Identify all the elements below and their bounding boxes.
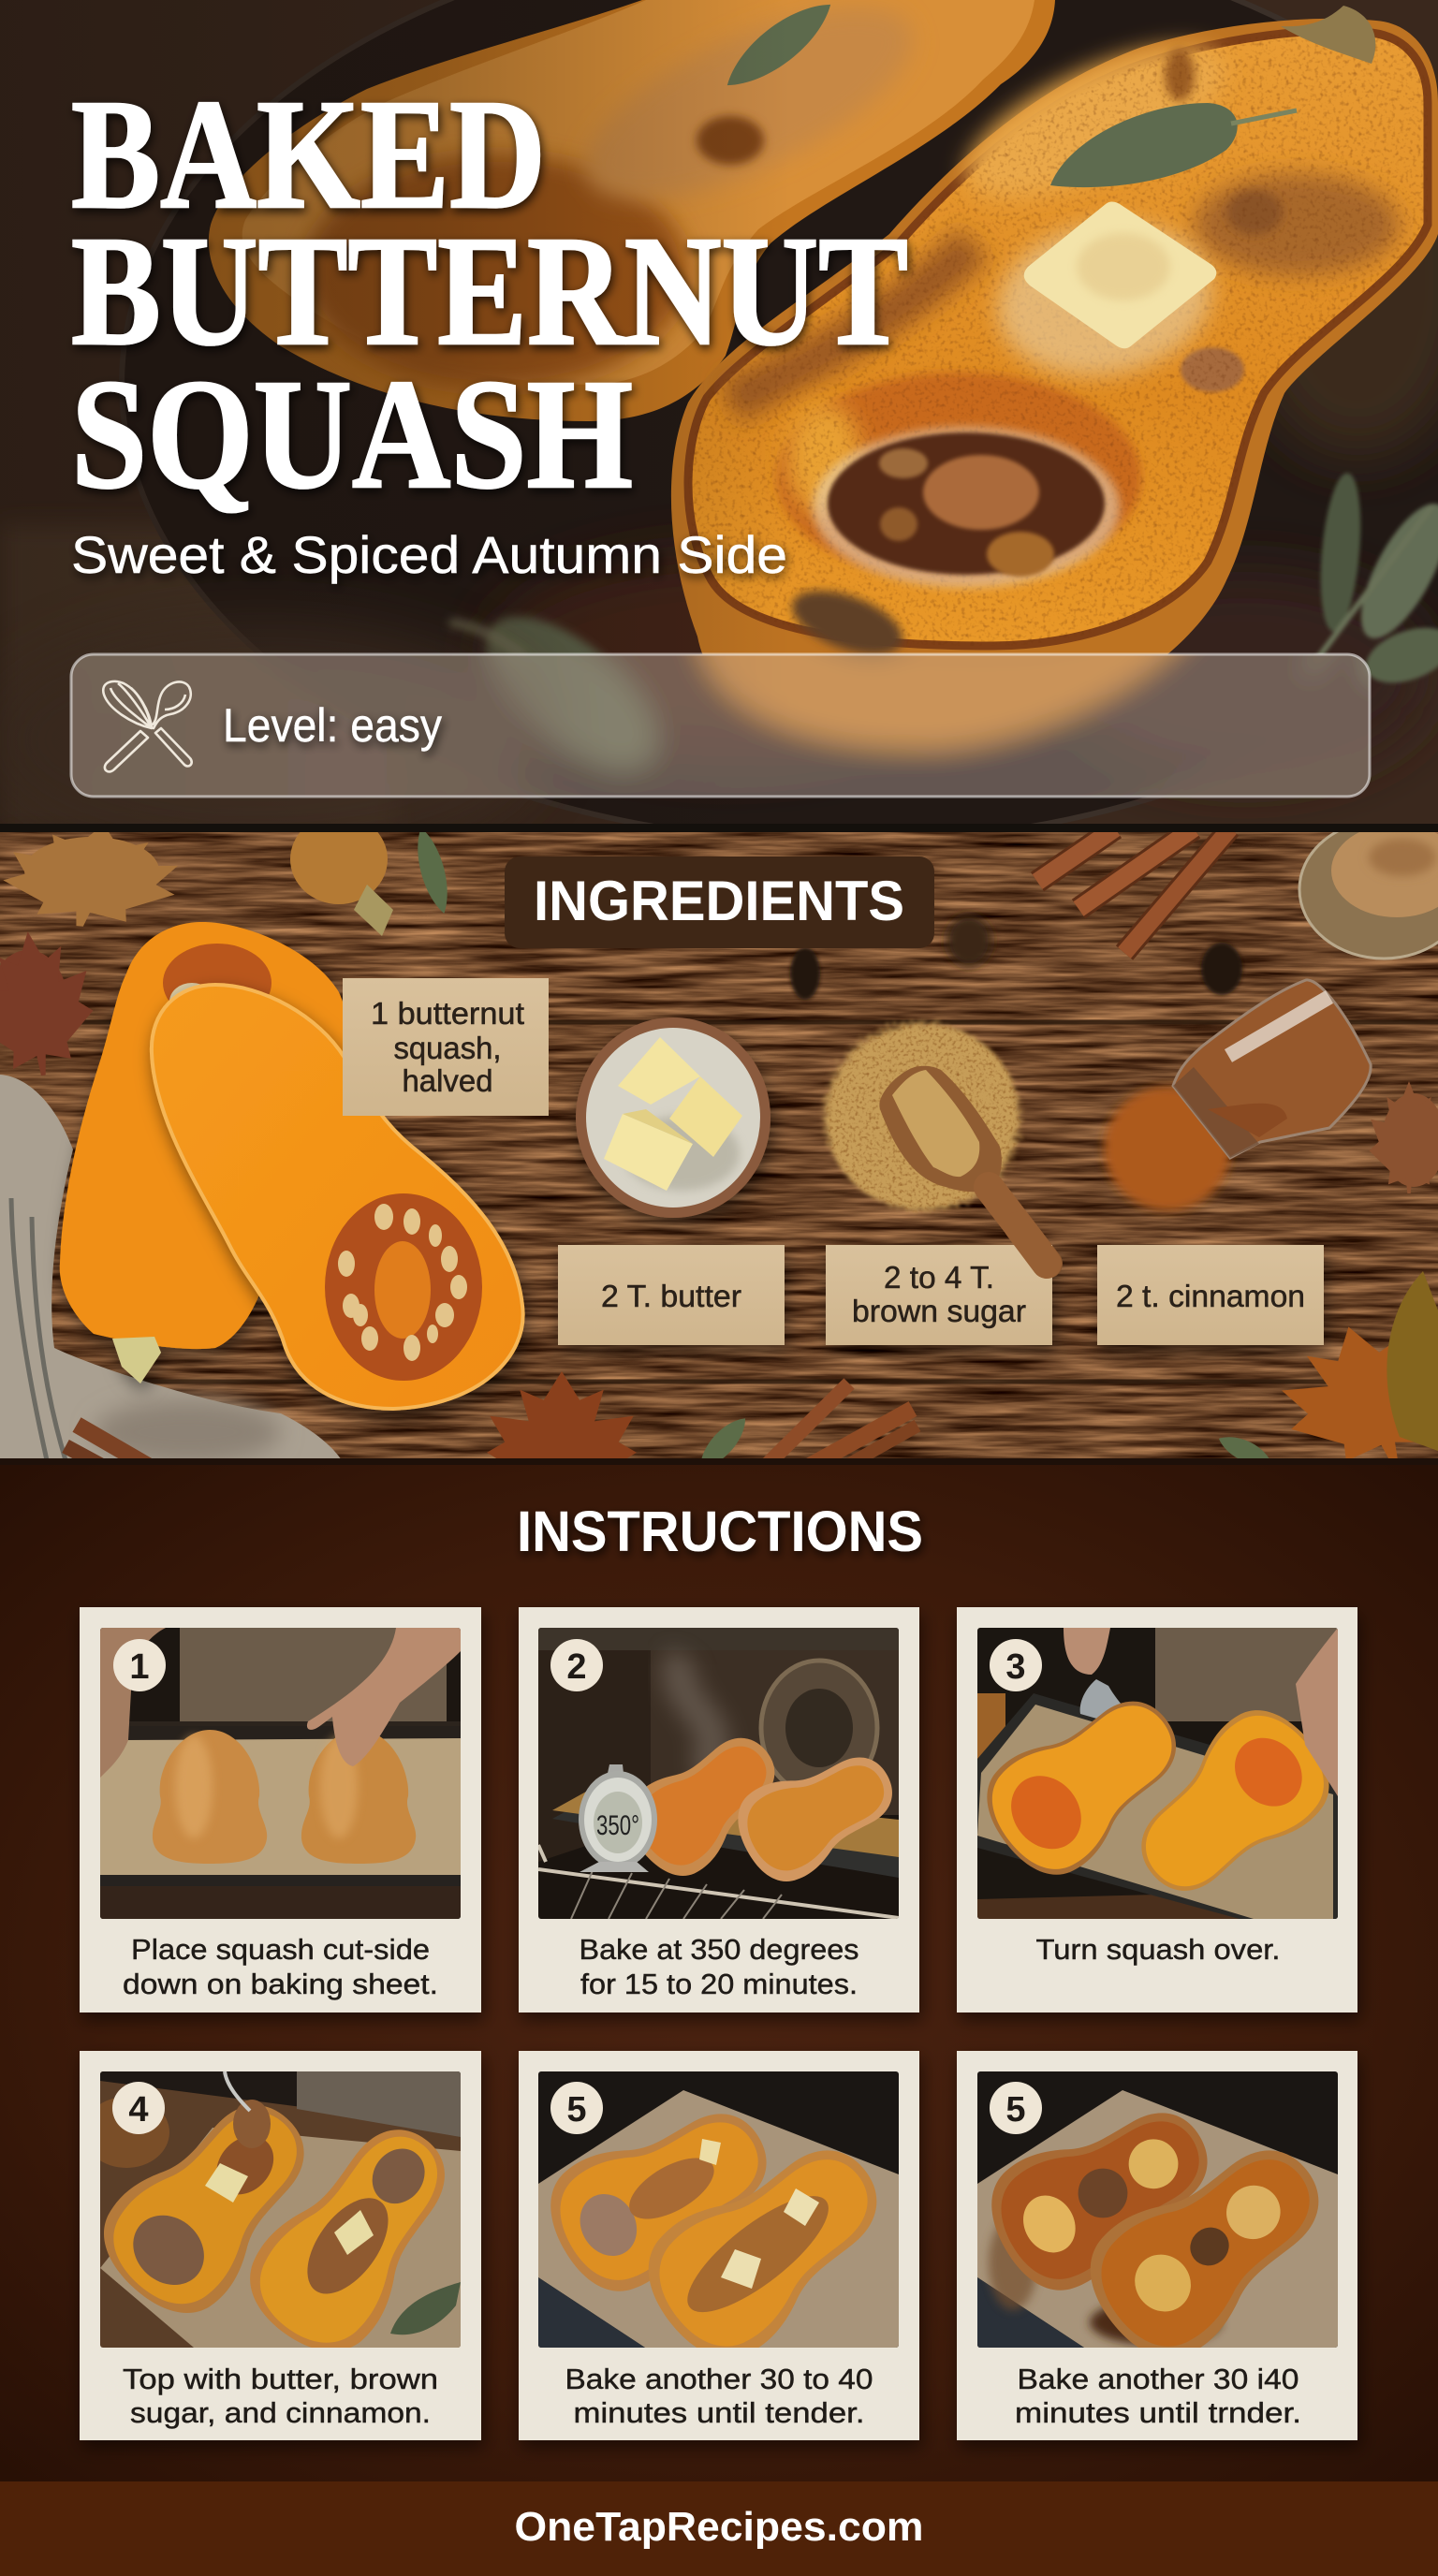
scoop handle end over label: [1019, 1226, 1047, 1264]
label: butter: [558, 1245, 785, 1345]
step badge: 1: [129, 1647, 150, 1687]
level text: Level: easy: [223, 699, 442, 752]
step caption: [565, 2363, 873, 2429]
step caption: Turn squash over.: [1035, 1933, 1281, 1966]
label: cinnamon: [1097, 1245, 1324, 1345]
stem: [1281, 6, 1375, 64]
step caption: down on baking sheet.: [123, 1968, 438, 2000]
photo: topping squash: [81, 2071, 481, 2374]
autumn leaves bottom right: [1263, 1271, 1438, 1481]
oven thermometer: 350°: [596, 1810, 639, 1841]
step badge: 5: [1005, 2090, 1026, 2130]
photo: oven with thermometer: [538, 1628, 911, 1919]
ingredients heading: INGREDIENTS: [534, 870, 904, 932]
butter bowl: [576, 1017, 770, 1218]
instructions heading: INSTRUCTIONS: [517, 1500, 923, 1563]
step caption: sugar, and cinnamon.: [130, 2396, 431, 2429]
step badge: [112, 2082, 165, 2134]
cinnamon jar: [1173, 980, 1371, 1158]
step card 4: [80, 2051, 481, 2440]
hero photo: baked squash on plate: [0, 0, 1438, 861]
oven thermometer: [579, 1764, 657, 1872]
footer: [0, 2481, 1438, 2576]
step card 6: [957, 2051, 1357, 2440]
step caption: Top with butter, brown: [123, 2363, 438, 2395]
title: BAKED: [71, 67, 546, 242]
step caption: [1015, 2363, 1301, 2429]
step caption: Bake another 30 i40: [1017, 2363, 1299, 2395]
ingredients heading: [505, 856, 934, 948]
label: squash: halved: [403, 1063, 492, 1098]
step badge: [550, 2082, 603, 2134]
step badge: [113, 1639, 166, 1691]
cinnamon sticks top right: [1037, 828, 1230, 953]
sage leaf: [1050, 103, 1297, 187]
photo: turning squash: [967, 1628, 1349, 1923]
cinnamon sticks bottom left: [66, 1425, 154, 1471]
bottom sage leaf: [692, 1411, 754, 1476]
label: brown sugar: [826, 1245, 1052, 1345]
icon: whisk and spoon: [103, 681, 192, 771]
cinnamon pile: [1104, 1087, 1231, 1210]
wooden scoop: [879, 1066, 1002, 1192]
step caption: for 15 to 20 minutes.: [580, 1968, 858, 2000]
instructions section background: [0, 1465, 1438, 2481]
front squash half: [152, 985, 523, 1409]
right sage sprig: [1306, 472, 1438, 694]
right leaf: [1369, 1081, 1438, 1193]
footer: OneTapRecipes.com: [515, 2504, 923, 2550]
step badge: 5: [566, 2090, 587, 2130]
top sage leaf: [726, 4, 831, 86]
step badge: [990, 2082, 1042, 2134]
ingredients section: wooden table: [0, 814, 1438, 1502]
label: squash: squash,: [393, 1031, 502, 1065]
step caption: Place squash cut-side: [131, 1933, 430, 1966]
photo: caramelized squash: [971, 2071, 1353, 2381]
flesh speckle: [683, 19, 1432, 655]
maple leaf top left: [4, 832, 178, 927]
red leaf left: [0, 932, 94, 1076]
small squash top: [290, 814, 393, 936]
title: [71, 67, 908, 521]
brown sugar pile: [825, 1023, 1048, 1264]
label: butter: 2 T. butter: [601, 1279, 741, 1313]
cloth bottom left: [0, 1075, 345, 1465]
step caption: Bake another 30 to 40: [565, 2363, 873, 2395]
label: brown sugar: 2 to 4 T.: [884, 1260, 994, 1295]
back squash half: [60, 922, 351, 1383]
bottom maple leaf: [487, 1371, 637, 1502]
label: cinnamon: 2 t. cinnamon: [1116, 1279, 1305, 1313]
step card 3: [957, 1607, 1357, 2012]
bottom cinnamon sticks: [762, 1383, 917, 1470]
step badge: [990, 1639, 1042, 1691]
step caption: minutes until tender.: [573, 2396, 865, 2429]
label: brown sugar: brown sugar: [852, 1294, 1026, 1328]
step caption: [123, 2363, 438, 2429]
level panel: [69, 653, 1371, 798]
bottom right sage leaf: [1214, 1429, 1276, 1472]
step caption: Bake at 350 degrees: [579, 1933, 859, 1966]
butter pat: [1024, 202, 1216, 348]
label: squash: [343, 978, 549, 1116]
seed cavity: [325, 1193, 482, 1381]
title: SQUASH: [71, 347, 633, 521]
title: BUTTERNUT: [71, 204, 908, 378]
subtitle: Sweet & Spiced Autumn Side: [71, 525, 787, 584]
lower sage: [446, 612, 669, 783]
step card 5: [519, 2051, 919, 2440]
step badge: 3: [1005, 1647, 1026, 1687]
step card 1: [80, 1607, 481, 2012]
melted butter foam: [986, 207, 1224, 392]
step card 2: [519, 1607, 919, 2012]
step caption: [579, 1933, 859, 2000]
step caption: [123, 1933, 438, 2000]
step caption: minutes until trnder.: [1015, 2396, 1301, 2429]
photo: squash on sheet: [100, 1628, 461, 1919]
label: squash: 1 butternut: [371, 996, 524, 1031]
spice jar top right: [1299, 820, 1438, 959]
step badge: [550, 1639, 603, 1691]
step badge: 4: [128, 2090, 149, 2130]
photo: baking squash: [530, 2071, 911, 2381]
green leaf top: [410, 825, 455, 916]
step badge: 2: [566, 1647, 587, 1687]
